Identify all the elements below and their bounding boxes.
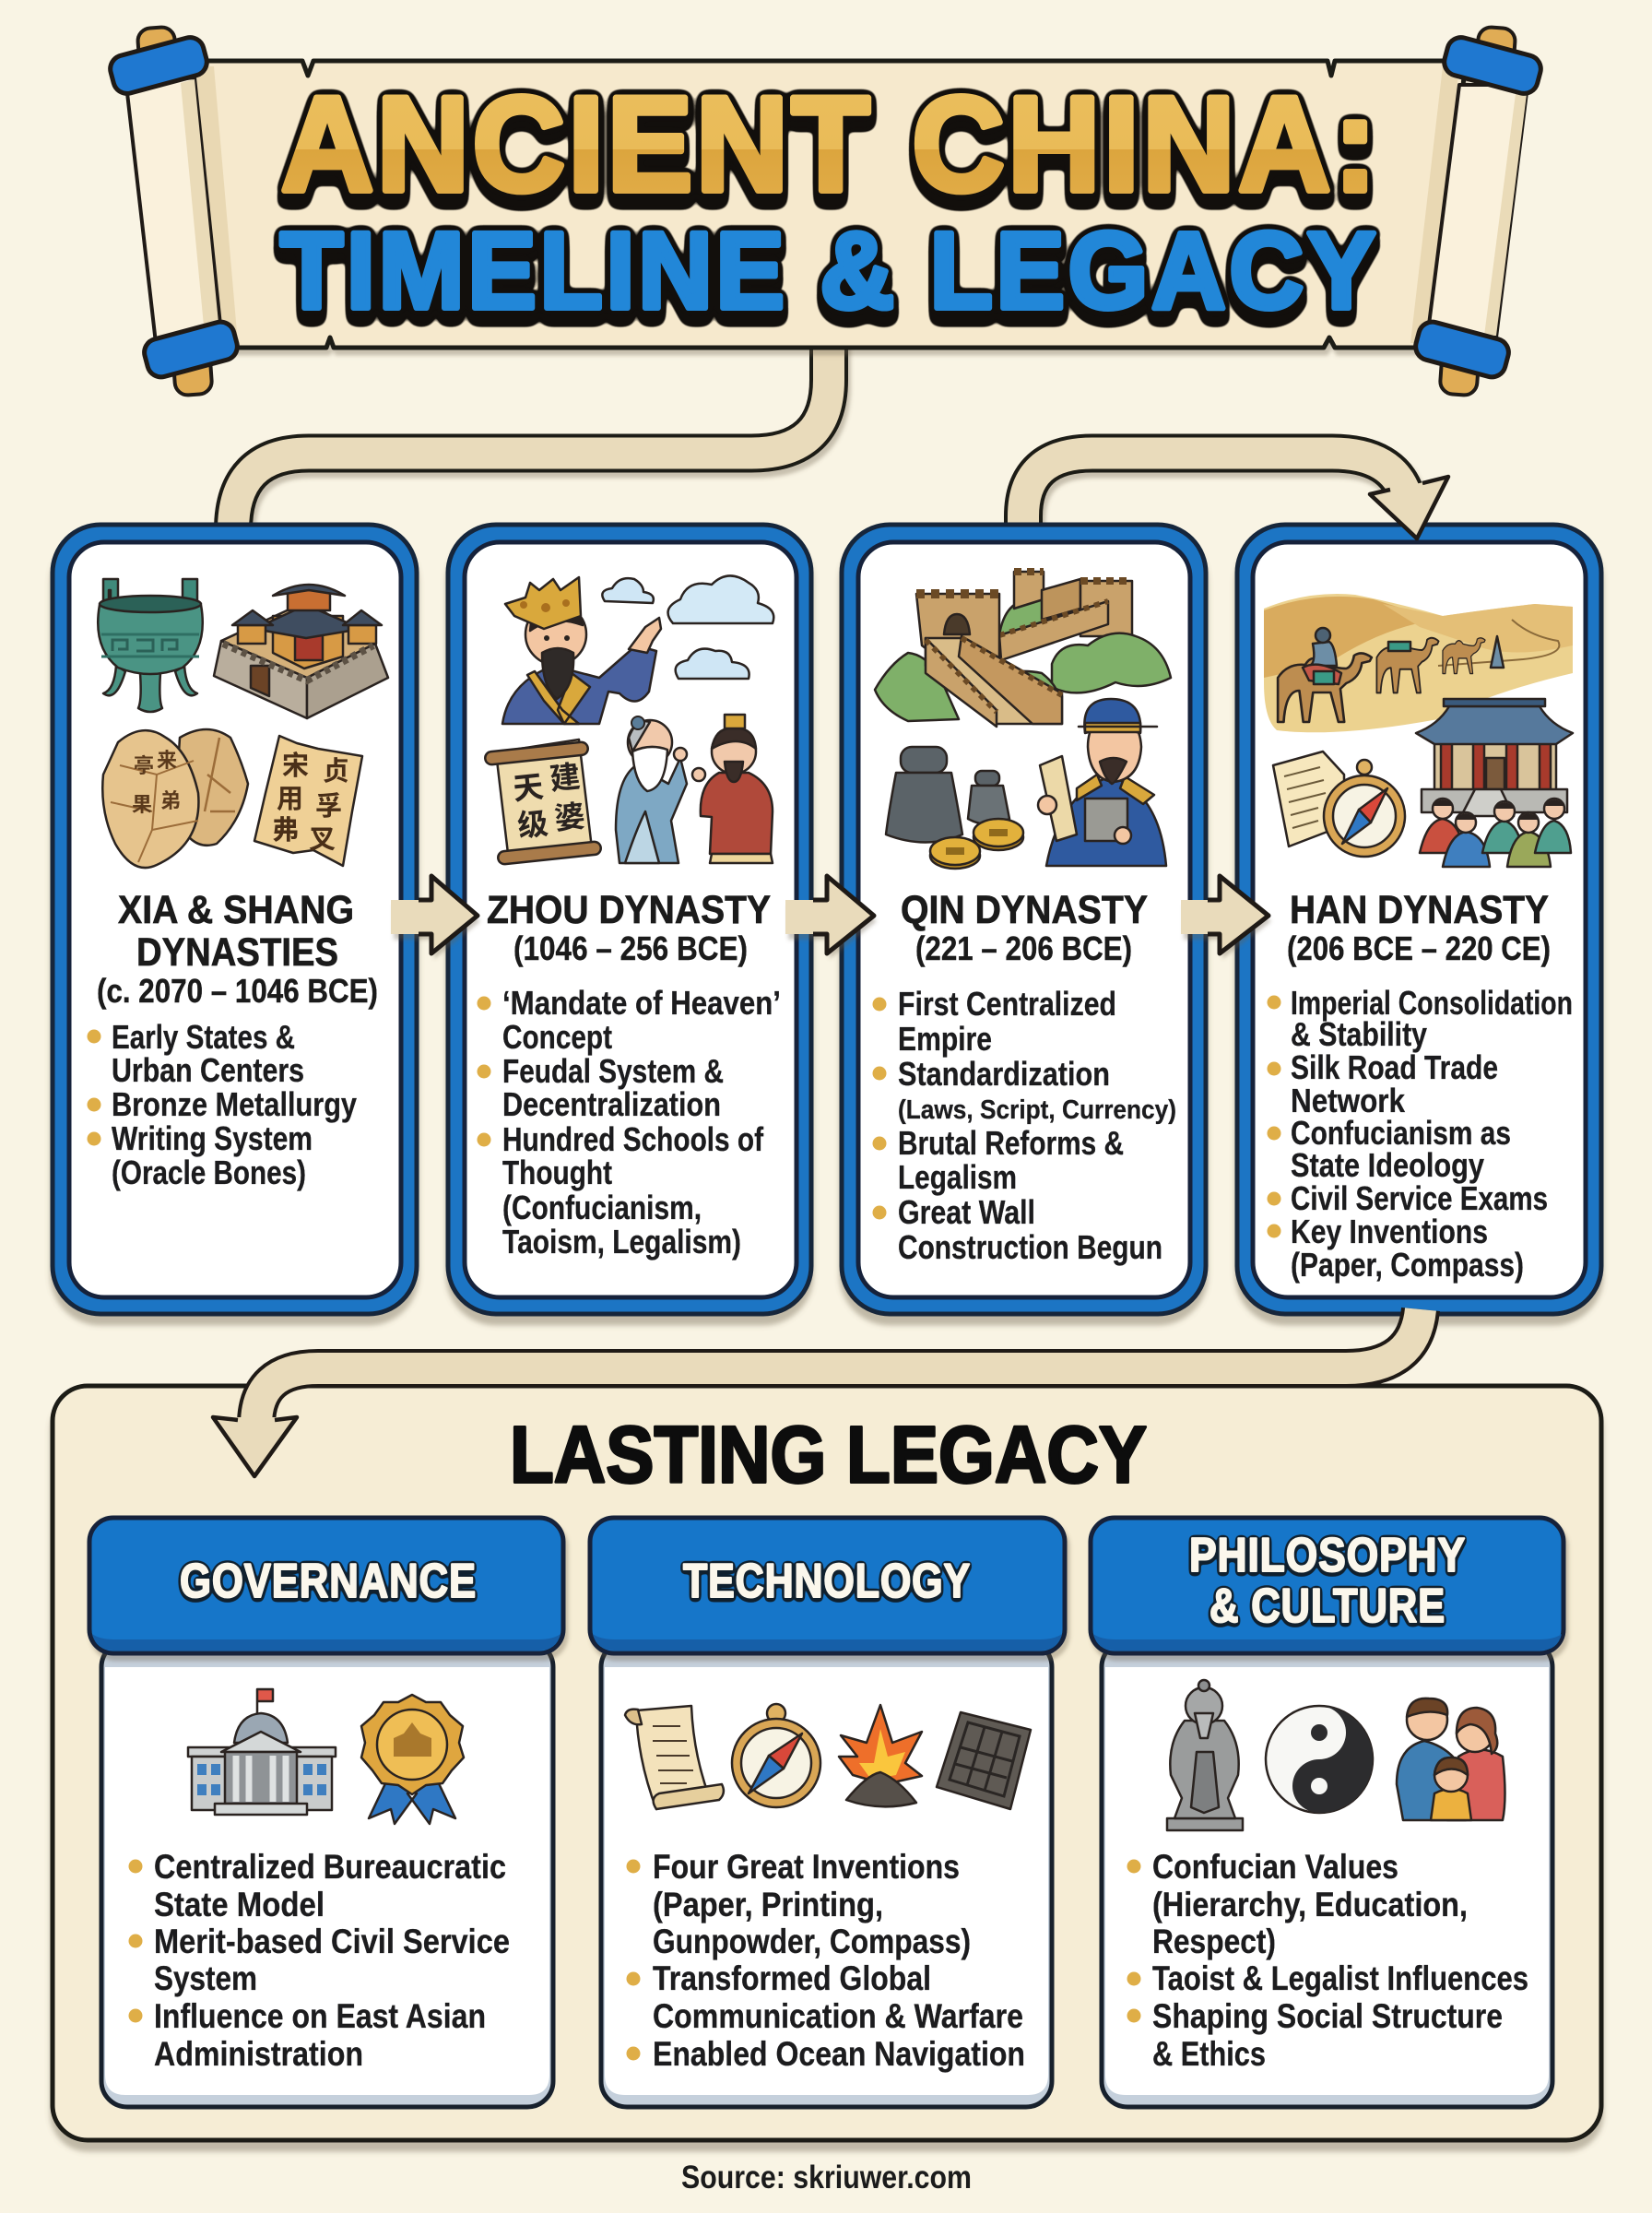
card frame bbox=[448, 525, 811, 1314]
icon: written scroll: 天 bbox=[512, 769, 545, 806]
column: governance bbox=[89, 1518, 563, 2107]
icon: inscribed tablet: 宋 bbox=[282, 751, 309, 781]
arrow: scroll to first dynasty card bbox=[233, 341, 829, 530]
bullet list: Civil Service Exams bbox=[1291, 1179, 1548, 1217]
icon: written scroll: 级 bbox=[516, 806, 549, 843]
icon: walled palace bbox=[214, 585, 388, 718]
header label: PHILOSOPHY bbox=[1189, 1529, 1466, 1582]
icon: gunpowder explosion bbox=[839, 1705, 922, 1806]
icon: government building bbox=[188, 1689, 336, 1815]
icon: written scroll: 婆 bbox=[553, 799, 586, 835]
bullet list: State Ideology bbox=[1291, 1146, 1484, 1184]
icon: inscribed tablet: 弗 bbox=[272, 815, 299, 846]
body card bbox=[601, 1641, 1052, 2107]
panel: lasting legacy bbox=[53, 1309, 1601, 2140]
bullet list: Confucianism as bbox=[1291, 1114, 1511, 1152]
icon: inscribed tablet bbox=[254, 736, 362, 866]
icon: emperor pointing to heaven bbox=[502, 577, 661, 724]
icon: Confucius statue bbox=[1167, 1680, 1243, 1830]
bullet list: Communication & Warfare bbox=[653, 1997, 1023, 2035]
bullet list: Shaping Social Structure bbox=[1152, 1997, 1503, 2035]
icon: document bbox=[1273, 751, 1344, 846]
bullet list: Imperial Consolidation bbox=[1291, 984, 1573, 1022]
bullet list: Taoist & Legalist Influences bbox=[1152, 1959, 1528, 1997]
bullet list: Respect) bbox=[1152, 1923, 1276, 1960]
header bbox=[1091, 1518, 1564, 1653]
left bushes bbox=[875, 653, 959, 721]
panel background bbox=[53, 1386, 1601, 2140]
icon: oracle bones: 弟 bbox=[160, 789, 181, 812]
dates: (206 BCE – 220 CE) bbox=[1287, 929, 1551, 967]
bullet list: Legalism bbox=[898, 1158, 1017, 1196]
title line 2: TIMELINE & LEGACY bbox=[280, 210, 1379, 332]
header label: & CULTURE bbox=[1210, 1580, 1446, 1633]
body card bbox=[101, 1641, 553, 2107]
bullet list bbox=[627, 1848, 1025, 2073]
bullet list: Enabled Ocean Navigation bbox=[653, 2035, 1025, 2073]
bullet list: Silk Road Trade bbox=[1291, 1048, 1498, 1086]
scroll sheet bbox=[184, 61, 1466, 348]
icon: compass bbox=[732, 1704, 820, 1807]
bullet list: Great Wall bbox=[898, 1193, 1035, 1231]
dates: (1046 – 256 BCE) bbox=[513, 929, 748, 967]
walking traveller bbox=[1491, 636, 1504, 668]
header label: TECHNOLOGY bbox=[683, 1555, 971, 1608]
icon: oracle bones: 亭 bbox=[134, 754, 154, 777]
card frame bbox=[842, 525, 1206, 1314]
bullet list: Centralized Bureaucratic bbox=[154, 1848, 506, 1886]
camel trailing bbox=[1443, 638, 1485, 674]
icon: merit medal bbox=[361, 1695, 464, 1824]
heading: HAN DYNASTY bbox=[1290, 888, 1549, 932]
icon: compass bbox=[1324, 760, 1405, 857]
main tower bbox=[916, 594, 999, 680]
stairs bbox=[926, 638, 1062, 724]
bullet list: (Paper, Printing, bbox=[653, 1886, 883, 1923]
arrow: Zhou to Qin bbox=[785, 876, 874, 953]
panel: Xia and Shang dynasties bbox=[53, 525, 417, 1314]
header label: GOVERNANCE bbox=[180, 1555, 477, 1608]
header bbox=[89, 1518, 563, 1653]
bullet list: Four Great Inventions bbox=[653, 1848, 960, 1886]
icon: oracle bones: 来 bbox=[157, 749, 177, 772]
bullet list: Feudal System & bbox=[502, 1052, 724, 1090]
bullet list: Transformed Global bbox=[653, 1959, 931, 1997]
icon: inscribed tablet: 叉 bbox=[309, 825, 336, 855]
bullet list: (Hierarchy, Education, bbox=[1152, 1886, 1468, 1923]
dates: (c. 2070 – 1046 BCE) bbox=[97, 972, 378, 1010]
bullet list: Gunpowder, Compass) bbox=[653, 1923, 971, 1960]
dates: (221 – 206 BCE) bbox=[915, 929, 1132, 967]
icon: Silk Road desert caravan bbox=[1264, 594, 1573, 732]
bullet list: (Confucianism, bbox=[502, 1189, 702, 1226]
icon: written scroll bbox=[485, 740, 601, 865]
icon: bronze ding vessel bbox=[98, 579, 203, 712]
bullet list: & Stability bbox=[1291, 1015, 1427, 1053]
bullet list: First Centralized bbox=[898, 985, 1116, 1023]
card frame bbox=[1237, 525, 1601, 1314]
heading: DYNASTIES bbox=[136, 930, 338, 975]
heading bbox=[118, 888, 354, 975]
title scroll banner bbox=[107, 27, 1544, 396]
panel: Zhou dynasty bbox=[448, 525, 811, 1314]
bullet list bbox=[872, 985, 1176, 1266]
icon: family bbox=[1397, 1698, 1504, 1820]
bullet list: Empire bbox=[898, 1020, 992, 1058]
right bushes bbox=[1052, 633, 1171, 692]
bullet list: Hundred Schools of bbox=[502, 1120, 764, 1158]
header bbox=[590, 1518, 1065, 1653]
icon: inscribed tablet: 孚 bbox=[315, 791, 342, 822]
icon: Great Wall bbox=[875, 572, 1171, 727]
bullet list: Brutal Reforms & bbox=[898, 1124, 1124, 1162]
bullet list: Concept bbox=[502, 1018, 612, 1056]
bullet list: Standardization bbox=[898, 1055, 1110, 1093]
bullet list: Early States & bbox=[112, 1018, 295, 1056]
bullet list: Urban Centers bbox=[112, 1051, 304, 1089]
icon: printing block bbox=[937, 1712, 1031, 1809]
bullet list bbox=[1267, 984, 1573, 1284]
far towers bbox=[1014, 572, 1044, 609]
bullet list: Bronze Metallurgy bbox=[112, 1085, 357, 1123]
icon: Qin official with scroll bbox=[1038, 699, 1166, 866]
bullet list: Thought bbox=[502, 1154, 612, 1191]
back wall bbox=[999, 601, 1108, 660]
bullet list: ‘Mandate of Heaven’ bbox=[502, 984, 781, 1022]
bullet list: Confucian Values bbox=[1152, 1848, 1398, 1886]
bullet list: Administration bbox=[154, 2035, 363, 2073]
icon: yin yang bbox=[1266, 1706, 1373, 1813]
bullet list bbox=[129, 1848, 510, 2073]
title bbox=[280, 68, 1380, 332]
bullet list: Network bbox=[1291, 1082, 1406, 1119]
icon: sage philosopher bbox=[616, 716, 687, 863]
bullet list: Influence on East Asian bbox=[154, 1997, 486, 2035]
bullet list: State Model bbox=[154, 1886, 324, 1923]
far green hill bbox=[999, 598, 1080, 650]
arrow: Qin card looping to Han card bbox=[1023, 454, 1407, 530]
bullet list: Writing System bbox=[112, 1119, 313, 1157]
icon: standard weights bbox=[886, 747, 1009, 843]
panel: Han dynasty bbox=[1237, 525, 1601, 1314]
camel with rider bbox=[1278, 628, 1372, 722]
bullet list bbox=[87, 1018, 357, 1191]
column: philosophy and culture bbox=[1091, 1518, 1564, 2107]
bullet list: (Paper, Compass) bbox=[1291, 1246, 1524, 1284]
heading: LASTING LEGACY bbox=[510, 1411, 1147, 1499]
arrowhead: loop into Han card bbox=[1370, 477, 1448, 538]
bullet list: (Laws, Script, Currency) bbox=[898, 1095, 1176, 1125]
icon: disciple bbox=[692, 715, 773, 863]
icon: inscribed tablet: 用 bbox=[277, 785, 303, 814]
camel with packs bbox=[1376, 638, 1439, 692]
heading: XIA & SHANG bbox=[118, 888, 354, 932]
bullet list bbox=[478, 984, 781, 1260]
heading: QIN DYNASTY bbox=[901, 888, 1148, 932]
bullet list: Key Inventions bbox=[1291, 1213, 1488, 1250]
icon: bronze coins bbox=[930, 819, 1023, 869]
bullet list bbox=[1127, 1848, 1528, 2073]
header label bbox=[1189, 1529, 1466, 1633]
bullet list: & Ethics bbox=[1152, 2035, 1266, 2073]
column: technology bbox=[590, 1518, 1065, 2107]
body card bbox=[1102, 1641, 1552, 2107]
icon: exam candidates bbox=[1420, 799, 1571, 867]
card frame bbox=[53, 525, 417, 1314]
right roller bbox=[1412, 27, 1544, 396]
arrow: Qin to Han bbox=[1181, 876, 1268, 953]
arrow: Xia-Shang to Zhou bbox=[391, 876, 478, 953]
panel: Qin dynasty bbox=[842, 525, 1206, 1314]
bullet list: Merit-based Civil Service bbox=[154, 1923, 510, 1960]
left roller bbox=[107, 27, 241, 396]
icon: oracle bones bbox=[102, 729, 248, 868]
bullet list: System bbox=[154, 1959, 257, 1997]
arrow: Han card to legacy panel bbox=[213, 1309, 1421, 1476]
icon: oracle bones: 果 bbox=[132, 793, 152, 816]
bullet list: (Oracle Bones) bbox=[112, 1154, 306, 1191]
source line: Source: skriuwer.com bbox=[681, 2160, 972, 2195]
bullet list: Decentralization bbox=[502, 1085, 721, 1123]
bullet list: Taoism, Legalism) bbox=[502, 1223, 741, 1260]
bullet list: Construction Begun bbox=[898, 1228, 1162, 1266]
title line 1: ANCIENT CHINA: bbox=[281, 68, 1380, 219]
heading: ZHOU DYNASTY bbox=[487, 888, 771, 932]
icon: clouds bbox=[602, 575, 773, 679]
icon: inscribed tablet: 贞 bbox=[323, 756, 349, 787]
icon: paper scroll bbox=[625, 1706, 724, 1809]
icon: exam hall bbox=[1416, 699, 1573, 816]
icon: written scroll: 建 bbox=[548, 759, 582, 796]
